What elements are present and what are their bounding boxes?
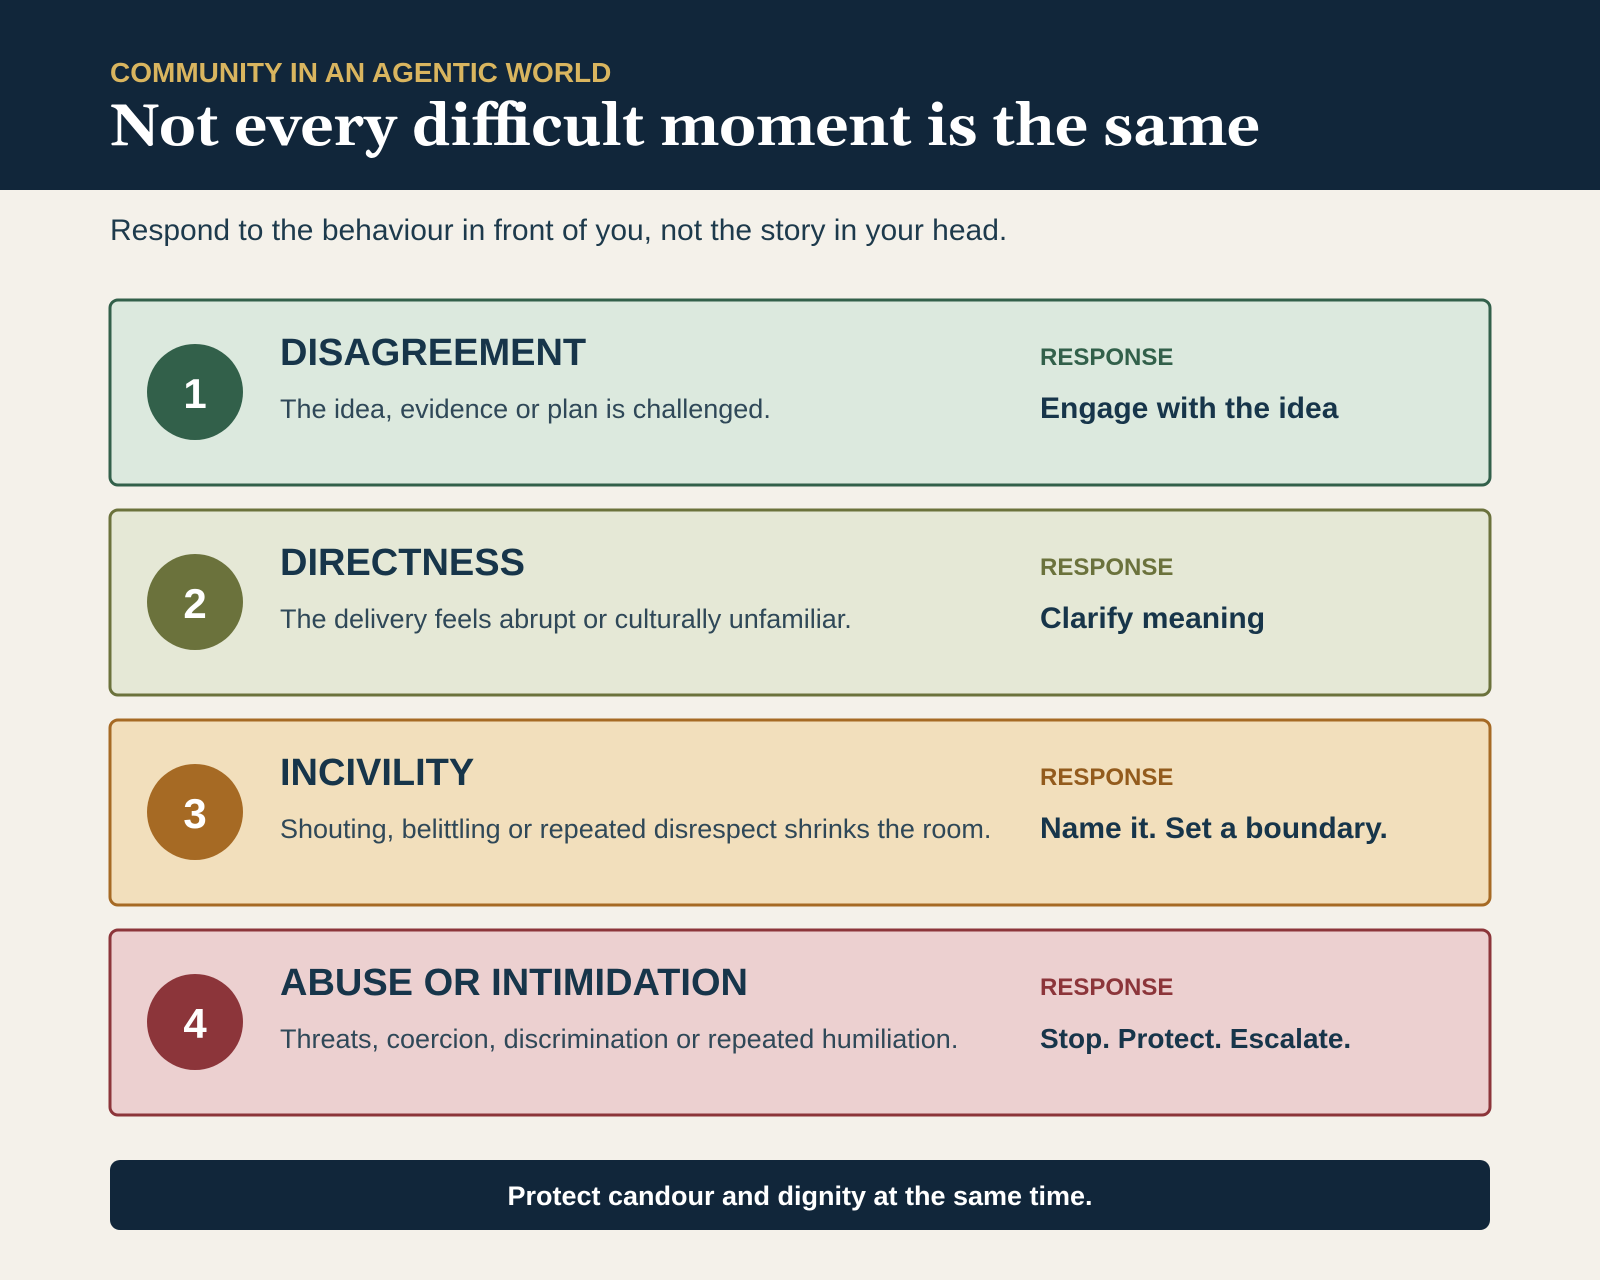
description: The idea, evidence or plan is challenged. [280, 394, 771, 424]
header banner [0, 0, 1600, 190]
footer callout [110, 1160, 1490, 1230]
number badge 1: 1 [183, 370, 207, 417]
response action: Stop. Protect. Escalate. [1040, 1023, 1351, 1054]
heading: DIRECTNESS [280, 542, 525, 584]
number badge 1 [147, 344, 243, 440]
description: Shouting, belittling or repeated disrespect shrinks the room. [280, 814, 991, 844]
response label: RESPONSE [1040, 764, 1173, 791]
footer callout: Protect candour and dignity at the same time. [507, 1181, 1093, 1211]
number badge 2: 2 [183, 580, 207, 627]
heading: DISAGREEMENT [280, 332, 586, 374]
heading: INCIVILITY [280, 752, 474, 794]
description: Threats, coercion, discrimination or repeated humiliation. [280, 1024, 958, 1054]
subtitle: Respond to the behaviour in front of you, not the story in your head. [110, 214, 1007, 247]
description: The delivery feels abrupt or culturally unfamiliar. [280, 604, 852, 634]
response label: RESPONSE [1040, 344, 1173, 371]
number badge 3 [147, 764, 243, 860]
response action: Engage with the idea [1040, 392, 1339, 425]
number badge 4: 4 [183, 1000, 207, 1047]
panel: disagreement [110, 300, 1490, 485]
number badge 4 [147, 974, 243, 1070]
panel: directness [110, 510, 1490, 695]
response action: Name it. Set a boundary. [1040, 812, 1388, 845]
number badge 3: 3 [183, 790, 207, 837]
heading: ABUSE OR INTIMIDATION [280, 962, 748, 1004]
panel: incivility [110, 720, 1490, 905]
kicker: COMMUNITY IN AN AGENTIC WORLD [110, 57, 611, 88]
number badge 2 [147, 554, 243, 650]
title: Not every difficult moment is the same [110, 91, 1260, 165]
response label: RESPONSE [1040, 974, 1173, 1001]
response label: RESPONSE [1040, 554, 1173, 581]
response action: Clarify meaning [1040, 602, 1265, 635]
panel: abuse or intimidation [110, 930, 1490, 1115]
